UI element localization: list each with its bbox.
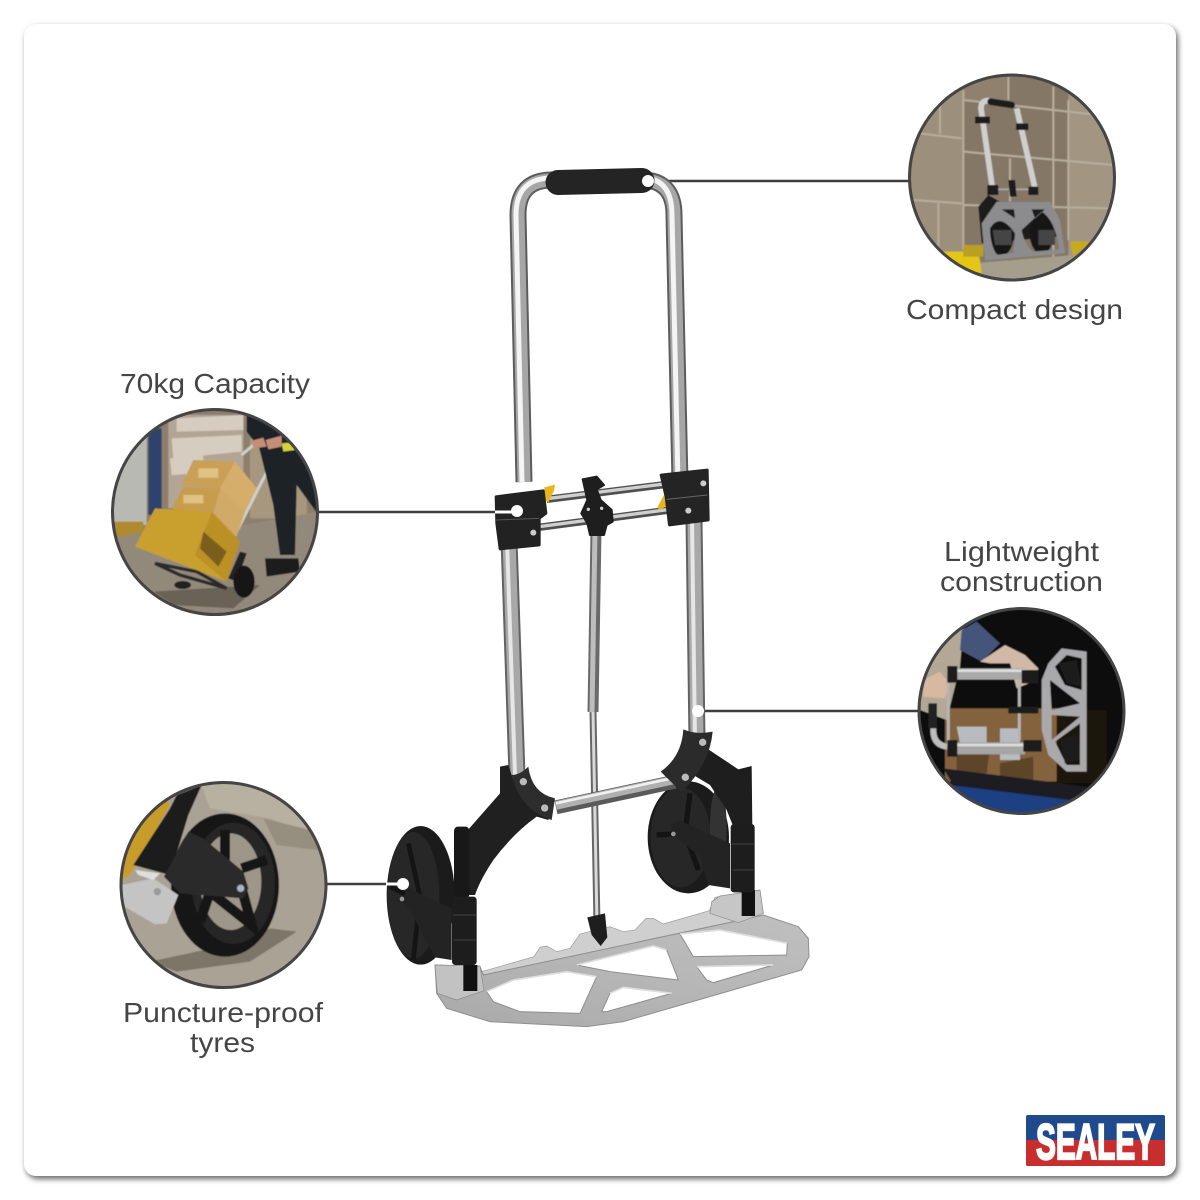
- marker dot: handle: [642, 175, 654, 187]
- label: puncture-proof tyres: Puncture-proof: [123, 997, 323, 1028]
- person: [920, 628, 963, 720]
- photo circle: compact design: [911, 76, 1113, 278]
- folded base plate: [1042, 648, 1087, 772]
- label: compact design: Compact design: [906, 294, 1123, 325]
- label: puncture-proof tyres: tyres: [190, 1027, 255, 1058]
- right foot bracket: [710, 890, 763, 923]
- label: lightweight construction: Lightweight: [944, 536, 1099, 567]
- label: puncture-proof tyres: [123, 997, 323, 1058]
- wheel bracket: [164, 832, 248, 898]
- upper handle tube: [516, 178, 680, 482]
- rod foot: [587, 913, 607, 946]
- left clamp: [496, 491, 546, 549]
- right wheel: [648, 781, 729, 893]
- right post sleeve: [731, 824, 755, 892]
- photo circle: lightweight construction: [920, 610, 1122, 812]
- left post top: [454, 827, 469, 898]
- right hinge: [742, 890, 755, 916]
- base plate rear rail: [482, 890, 763, 976]
- trolley tubes: [956, 667, 1025, 681]
- photo circle: puncture-proof tyres: [122, 784, 324, 986]
- connector line: capacity: [318, 511, 496, 513]
- ring: puncture-proof tyres: [121, 782, 326, 988]
- crossbar: [556, 778, 675, 807]
- connector line: tyres: [326, 883, 388, 885]
- upper and lower rods: [537, 484, 670, 528]
- right clamp: [661, 470, 708, 525]
- base plate: [435, 915, 809, 1027]
- plate hole bevels: [487, 930, 787, 993]
- centre telescopic rod: [592, 530, 597, 925]
- label: lightweight construction: [940, 536, 1103, 597]
- left hinge: [463, 965, 477, 991]
- label: 70kg capacity: 70kg Capacity: [120, 368, 310, 399]
- leg sleeve: [133, 785, 202, 875]
- ring: 70kg capacity: [112, 410, 318, 614]
- folding sack truck product image: [387, 178, 809, 1027]
- truck: [238, 444, 267, 530]
- right wheel bracket: [670, 821, 730, 888]
- yellow latches: [544, 479, 671, 510]
- operator: [247, 415, 323, 555]
- right arm plate: [695, 749, 752, 827]
- left post sleeve: [452, 897, 477, 965]
- connector line: compact design: [655, 180, 910, 182]
- boxes: [182, 460, 236, 489]
- cross rods and clamps, in zoom coordinates: [496, 470, 708, 549]
- marker dot: tube: [692, 705, 704, 717]
- centre clamp: [581, 477, 613, 535]
- foot plate: [122, 878, 178, 924]
- right clamp: [661, 729, 713, 792]
- marker dot: clamp: [495, 505, 523, 517]
- left clamp: [512, 767, 555, 820]
- photo circle: 70kg capacity: [114, 411, 316, 613]
- handle grip: [558, 180, 642, 182]
- lower tubes: [507, 520, 697, 775]
- wheel: [171, 813, 279, 957]
- label: lightweight construction: construction: [940, 566, 1103, 597]
- left wheel bracket: [401, 888, 452, 960]
- left foot bracket: [435, 965, 484, 1000]
- left arm: [463, 765, 553, 895]
- left wheel: [387, 826, 455, 965]
- lower frame and wheels, in zoom coordinates: [387, 729, 809, 1027]
- ring: compact design: [910, 75, 1114, 280]
- marker dot: wheel: [386, 878, 409, 890]
- connector line: lightweight: [704, 710, 920, 712]
- ring: lightweight construction: [919, 608, 1124, 814]
